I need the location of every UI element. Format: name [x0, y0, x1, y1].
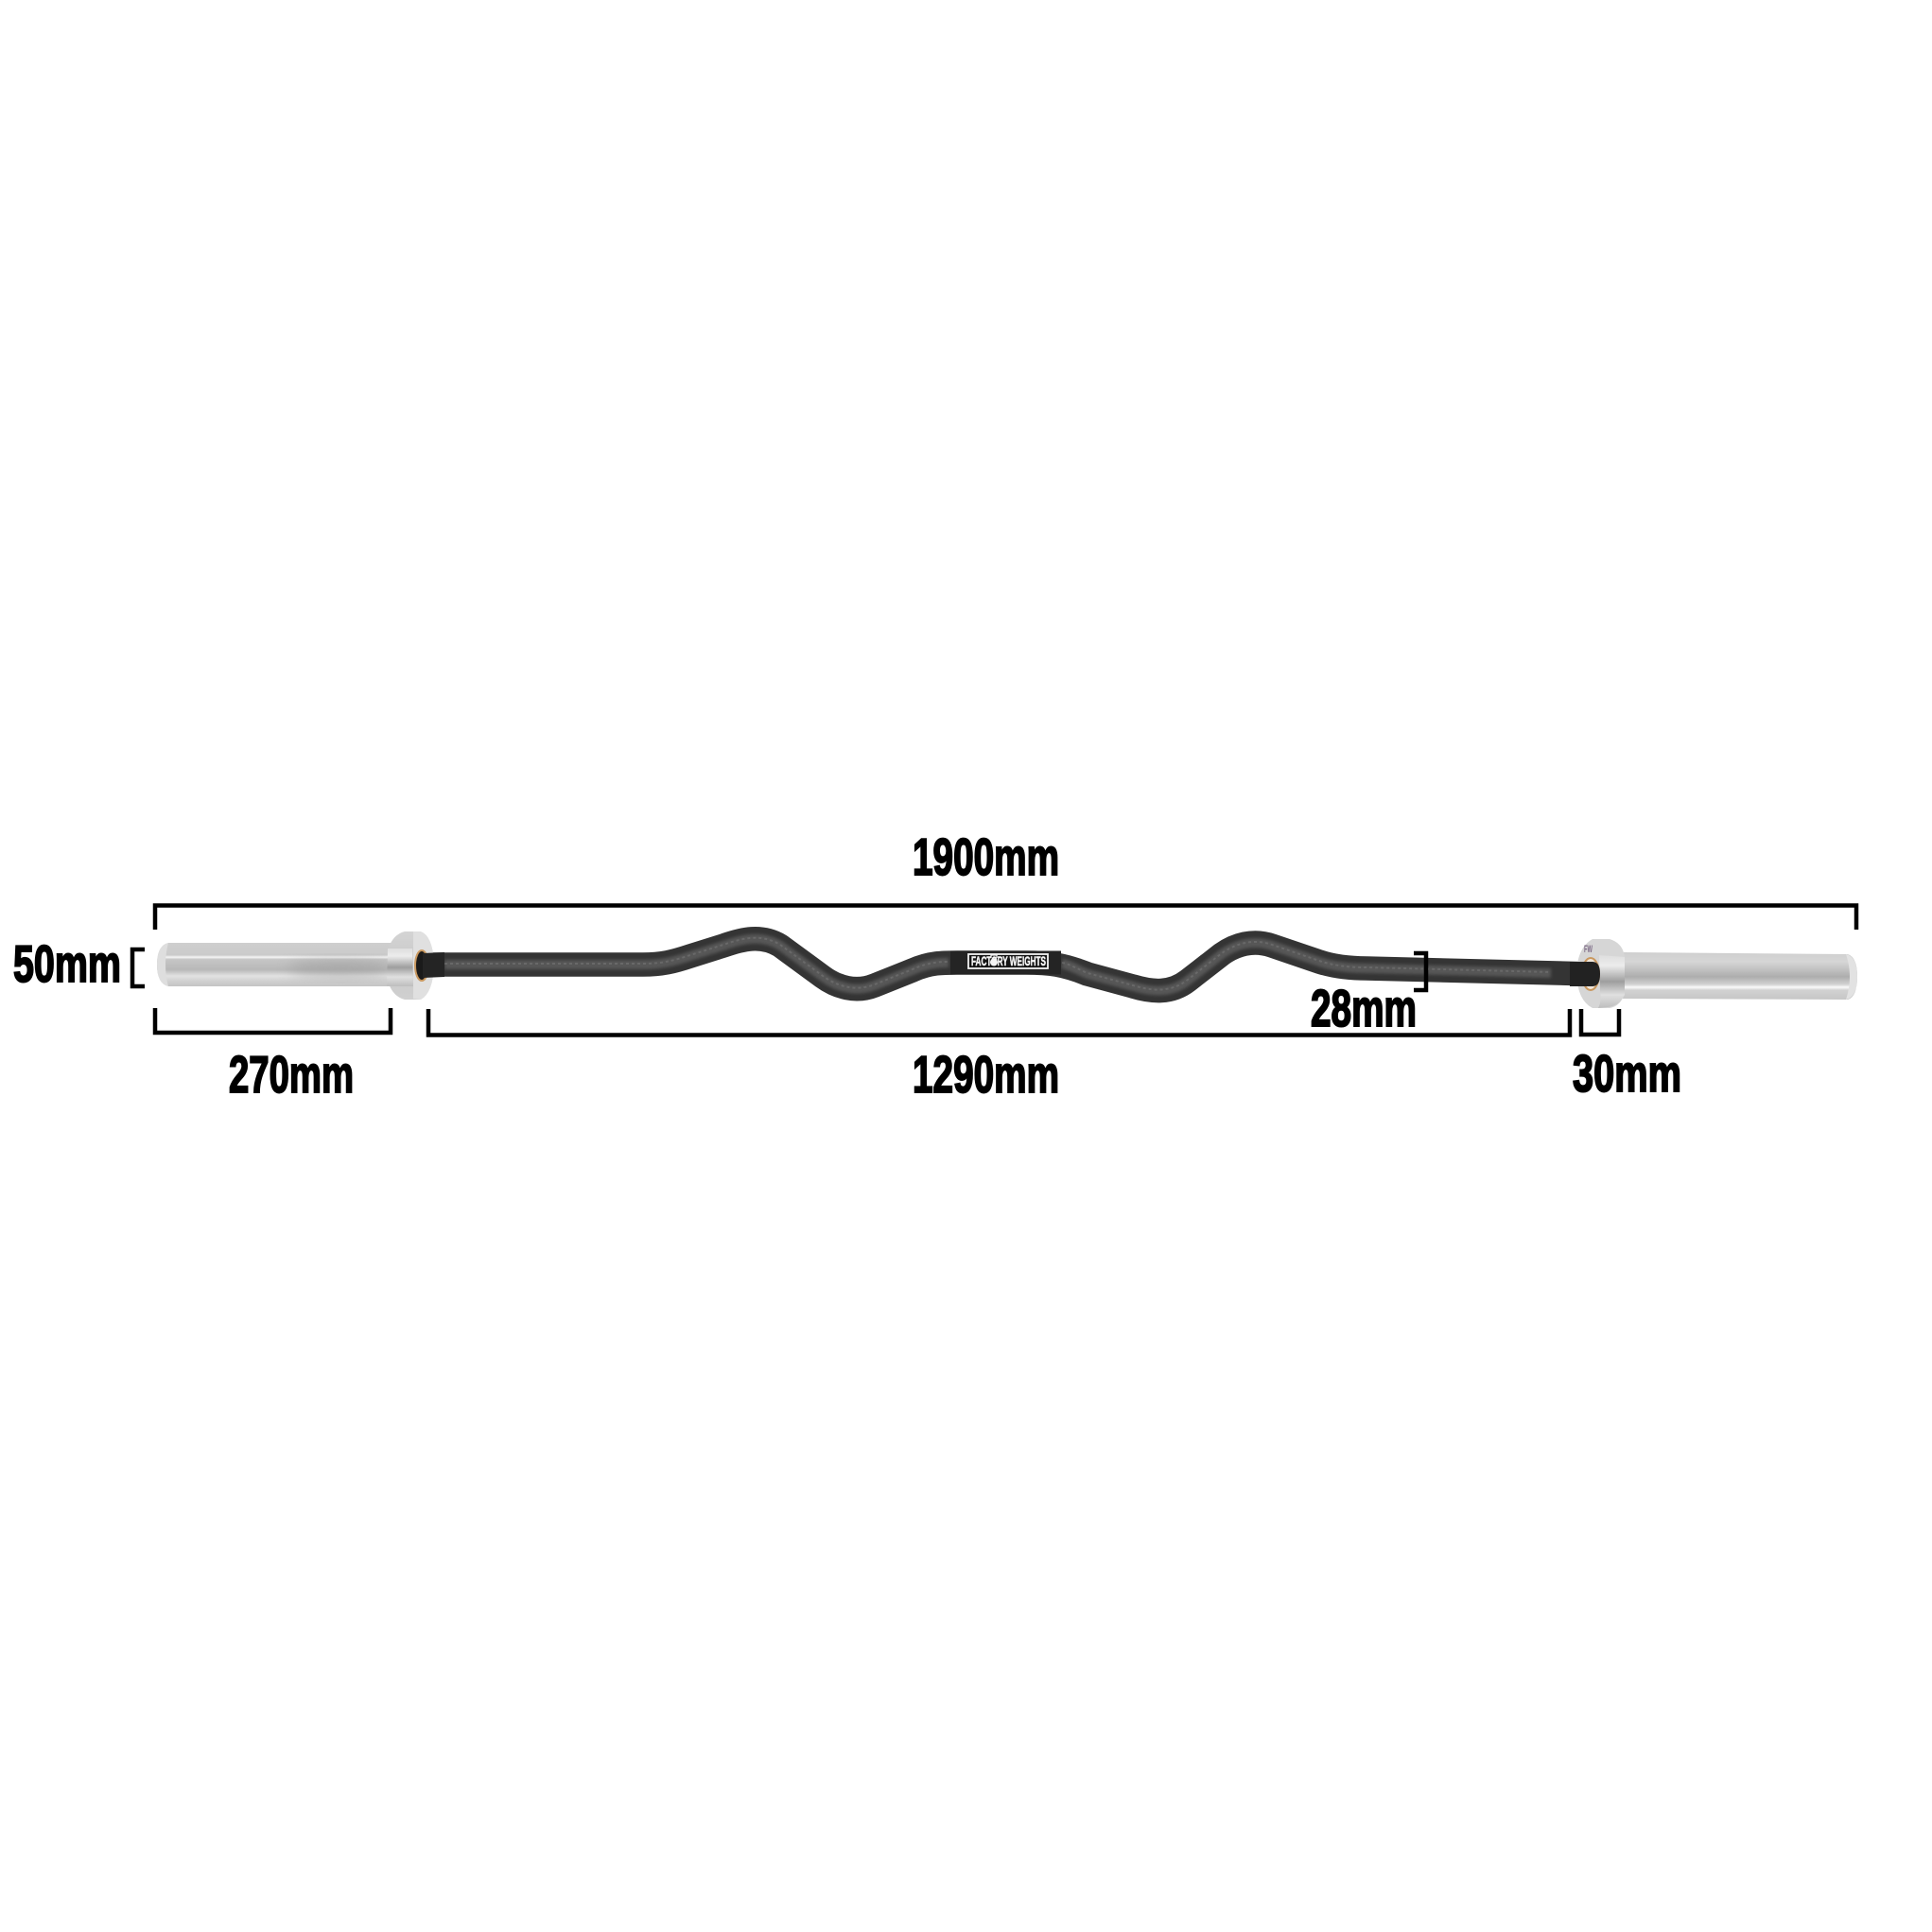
- logo label: Factory Weights: [968, 954, 1048, 968]
- right collar: FW: [1584, 944, 1593, 955]
- dimension bracket: collar width: [1581, 1009, 1619, 1035]
- dimension bracket: shaft length: [428, 1009, 1570, 1035]
- dimension bracket: sleeve length: [155, 1008, 391, 1033]
- label: 1900mm: 1900mm: [913, 827, 1059, 886]
- left sleeve: [157, 931, 444, 1000]
- label: 30mm: 30mm: [1573, 1044, 1681, 1103]
- right collar: [1570, 939, 1625, 1008]
- black curl bar shaft: [421, 938, 1593, 991]
- label: 50mm: 50mm: [13, 934, 121, 993]
- dimension bracket: shaft diameter: [1414, 953, 1426, 990]
- left collar: [387, 931, 444, 1000]
- logo label: Factory Weights: FACTORY WEIGHTS: [971, 954, 1046, 968]
- label: 28mm: 28mm: [1311, 979, 1417, 1037]
- label: 1290mm: 1290mm: [913, 1045, 1059, 1104]
- right sleeve: [1570, 939, 1857, 1008]
- dimension bracket: overall length: [155, 906, 1856, 930]
- dimension bracket: sleeve diameter: [132, 949, 145, 986]
- label: 270mm: 270mm: [229, 1045, 354, 1104]
- icon: kettlebell: [990, 955, 998, 966]
